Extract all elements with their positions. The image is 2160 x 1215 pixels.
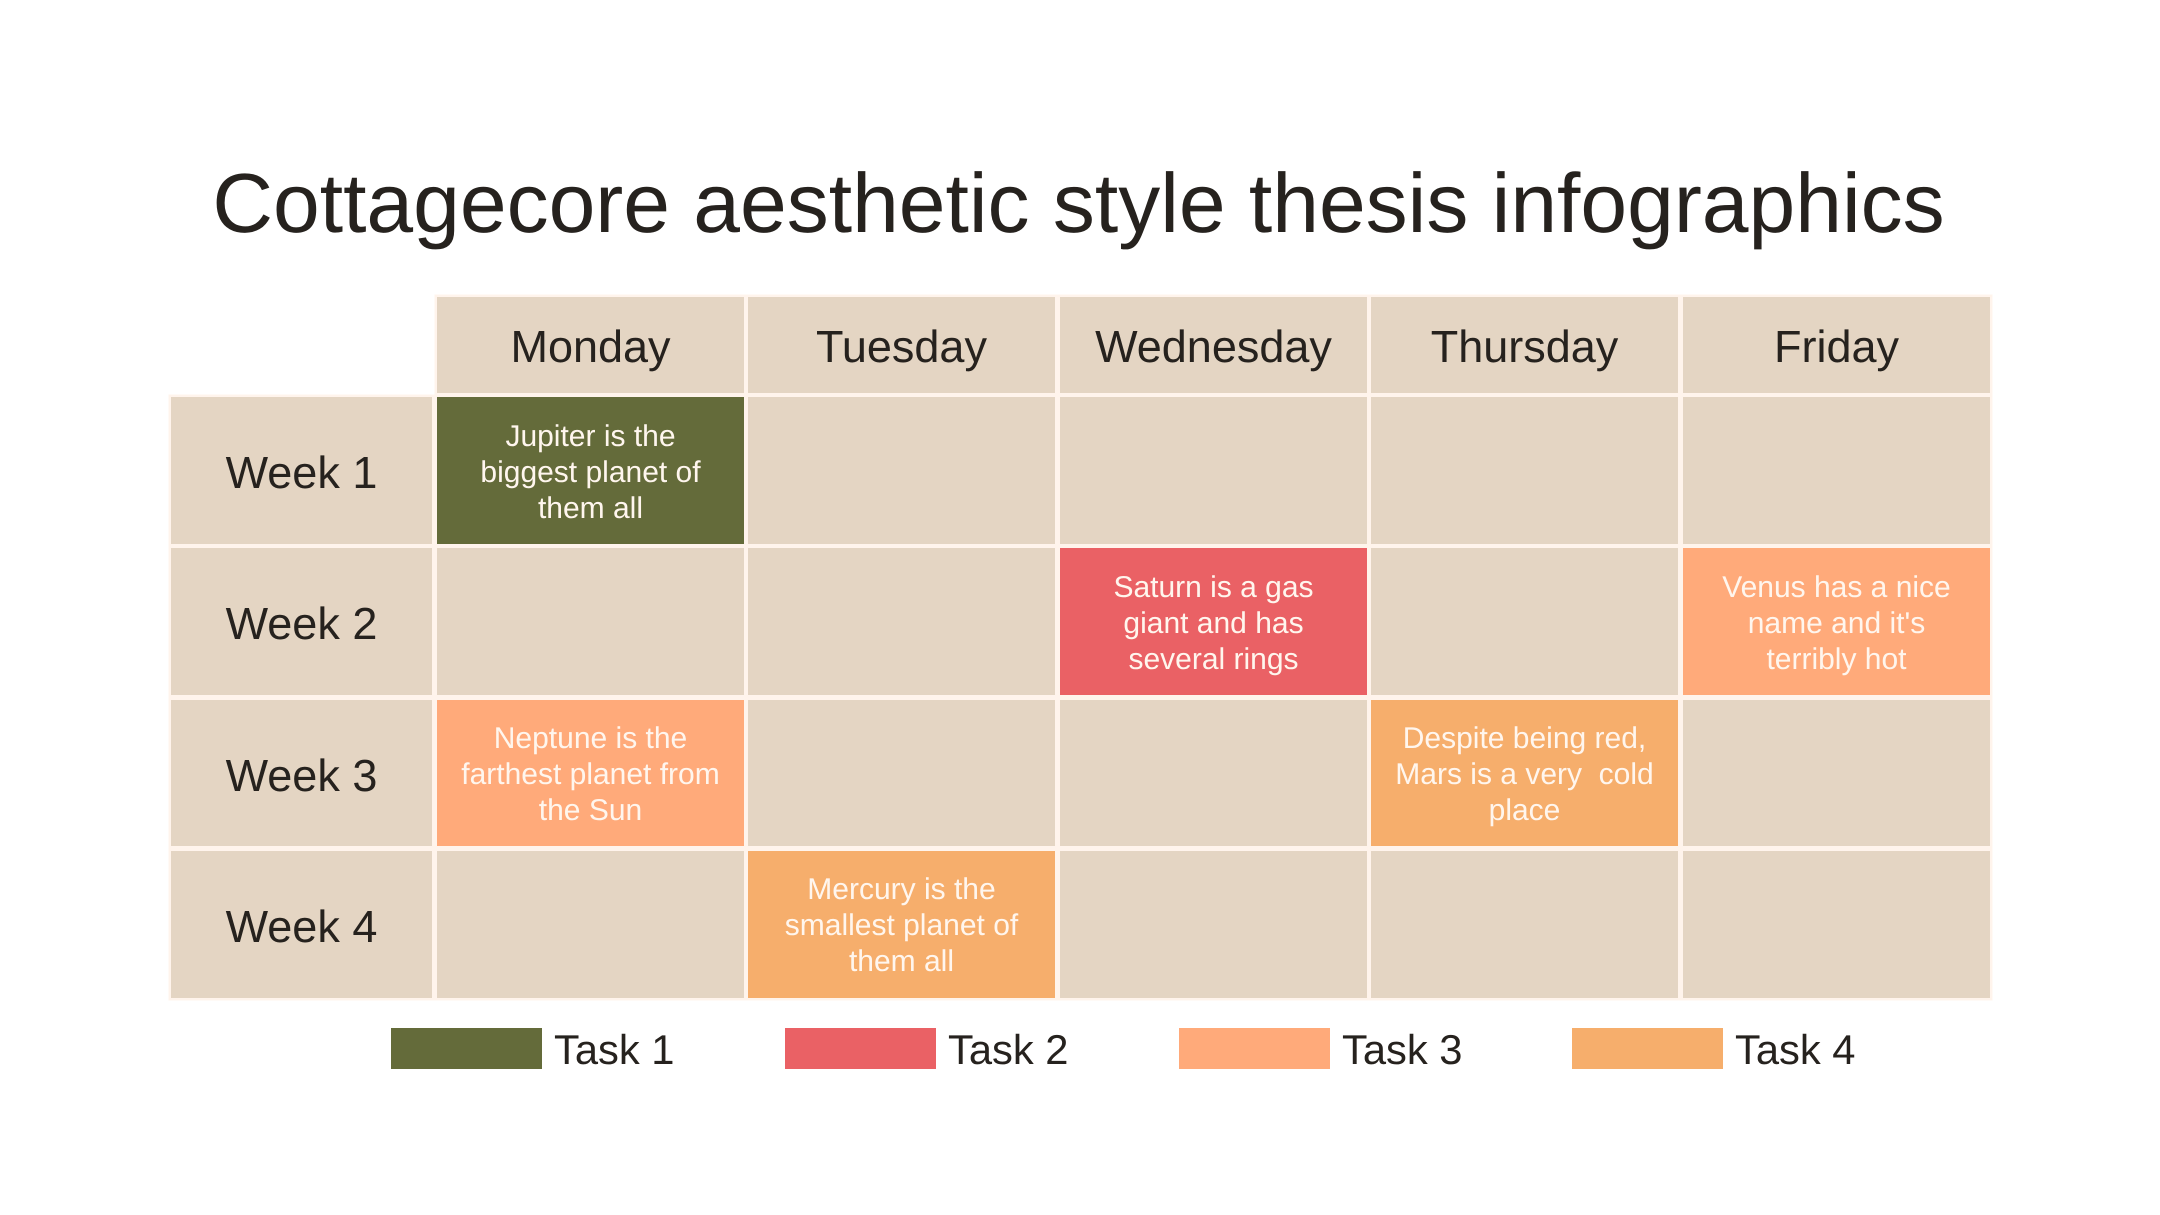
empty cell bbox=[1060, 700, 1367, 846]
row header: Week 3 bbox=[171, 700, 432, 846]
empty cell bbox=[1371, 851, 1678, 998]
task cell: Venus: Venus has a nice name and it's terribly hot bbox=[1722, 571, 1951, 676]
legend label: Task 3: Task 3 bbox=[1342, 1026, 1462, 1073]
column header: Monday bbox=[437, 297, 744, 393]
empty cell bbox=[1060, 851, 1367, 998]
row header: Week 2 bbox=[171, 548, 432, 695]
empty cell bbox=[1060, 397, 1367, 544]
task cell: Mars: Despite being red, Mars is a very cold place bbox=[1395, 722, 1654, 826]
legend swatch: Task 2 bbox=[785, 1028, 936, 1069]
column header: Tuesday: Tuesday bbox=[816, 320, 987, 372]
empty cell bbox=[748, 700, 1055, 846]
column header: Thursday bbox=[1371, 297, 1678, 393]
task cell: Saturn bbox=[1060, 548, 1367, 695]
row header: Week 4 bbox=[171, 851, 432, 998]
task cell: Mars bbox=[1371, 700, 1678, 846]
task cell: Venus bbox=[1683, 548, 1990, 695]
legend swatch: Task 1 bbox=[391, 1028, 542, 1069]
column header: Thursday: Thursday bbox=[1431, 320, 1618, 372]
row header: Week 1 bbox=[171, 397, 432, 544]
column header: Wednesday: Wednesday bbox=[1095, 320, 1332, 372]
task cell: Jupiter: Jupiter is the biggest planet of them all bbox=[480, 420, 701, 525]
empty cell bbox=[1683, 700, 1990, 846]
empty cell bbox=[437, 851, 744, 998]
title: Cottagecore aesthetic style thesis infographics bbox=[212, 156, 1945, 250]
task cell: Neptune bbox=[437, 700, 744, 846]
empty cell bbox=[1683, 851, 1990, 998]
empty cell bbox=[437, 548, 744, 695]
row header: Week 3: Week 3 bbox=[226, 750, 377, 800]
empty cell bbox=[748, 397, 1055, 544]
legend label: Task 1: Task 1 bbox=[554, 1026, 674, 1073]
row header: Week 4: Week 4 bbox=[226, 901, 377, 952]
empty cell bbox=[1371, 397, 1678, 544]
column header: Monday: Monday bbox=[510, 320, 671, 372]
column header: Tuesday bbox=[748, 297, 1055, 393]
legend bbox=[391, 1026, 1855, 1073]
task cell: Mercury bbox=[748, 851, 1055, 998]
empty cell bbox=[748, 548, 1055, 695]
legend swatch: Task 3 bbox=[1179, 1028, 1330, 1069]
task cell: Mercury: Mercury is the smallest planet of them all bbox=[785, 873, 1018, 978]
empty cell bbox=[1683, 397, 1990, 544]
task cell: Neptune: Neptune is the farthest planet from the Sun bbox=[461, 722, 720, 826]
task cell: Jupiter bbox=[437, 397, 744, 544]
task cell: Saturn: Saturn is a gas giant and has several rings bbox=[1113, 571, 1314, 676]
column header: Friday: Friday bbox=[1774, 320, 1899, 372]
row header: Week 2: Week 2 bbox=[226, 598, 377, 649]
legend label: Task 2: Task 2 bbox=[948, 1026, 1068, 1073]
row header: Week 1: Week 1 bbox=[226, 447, 377, 498]
legend label: Task 4: Task 4 bbox=[1735, 1026, 1855, 1073]
column header: Wednesday bbox=[1060, 297, 1367, 393]
empty cell bbox=[1371, 548, 1678, 695]
column header: Friday bbox=[1683, 297, 1990, 393]
legend swatch: Task 4 bbox=[1572, 1028, 1723, 1069]
